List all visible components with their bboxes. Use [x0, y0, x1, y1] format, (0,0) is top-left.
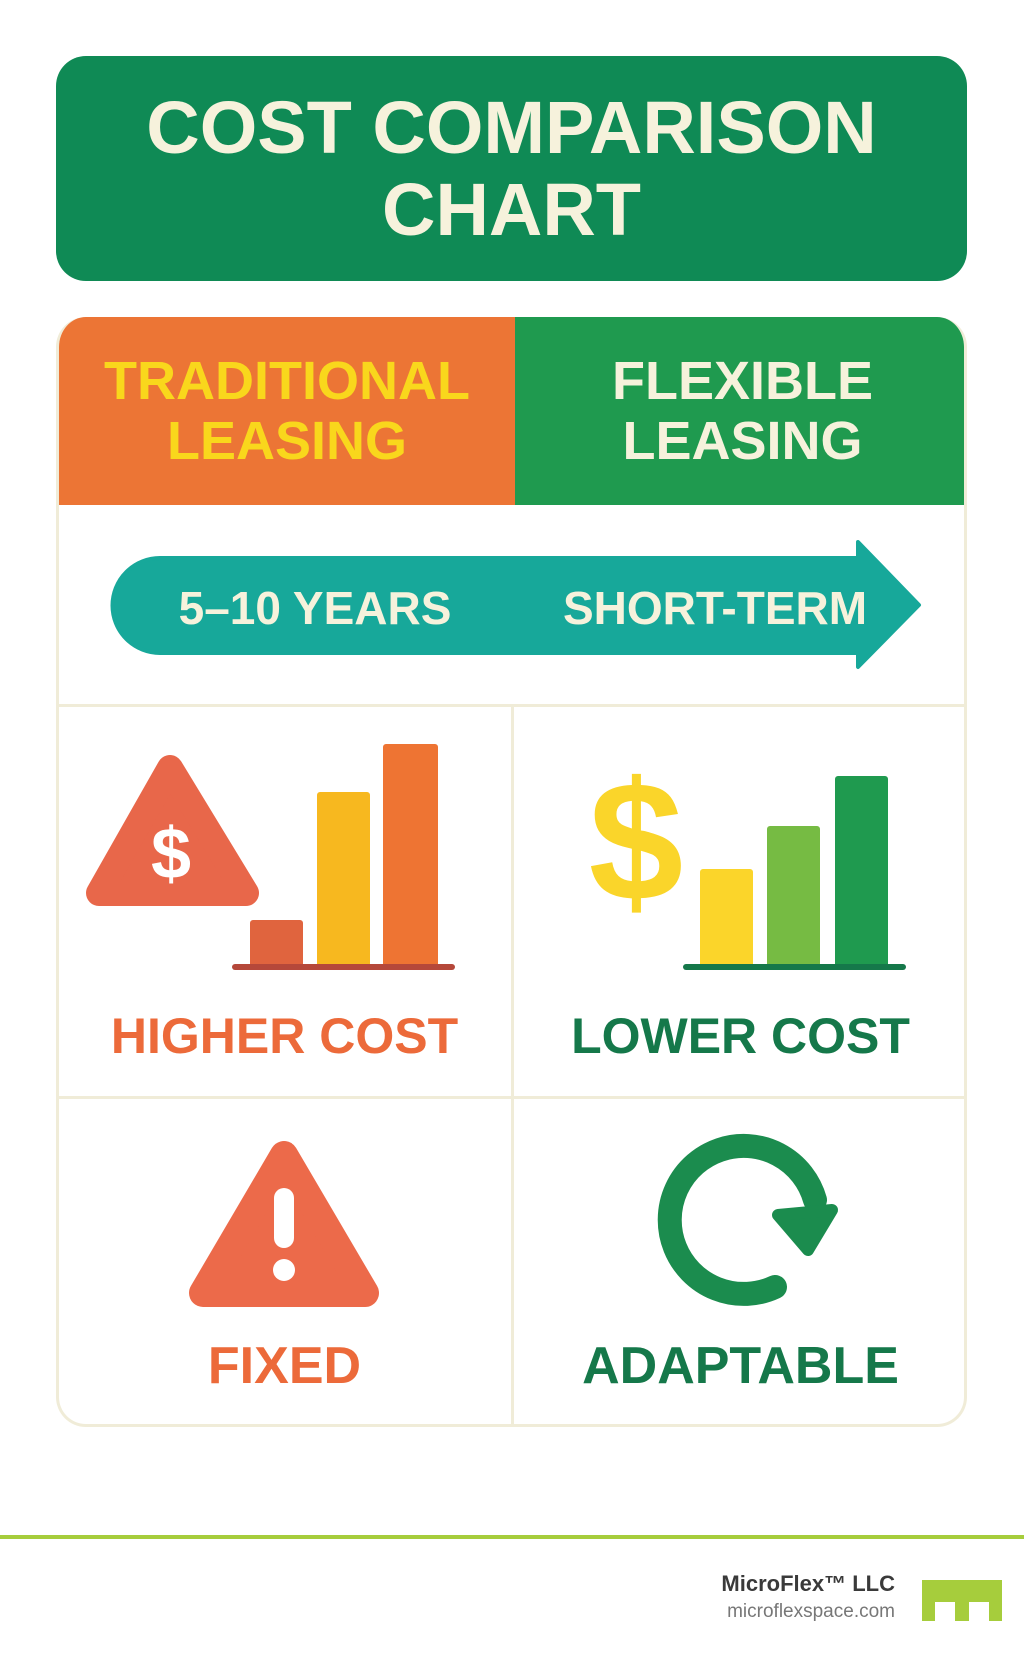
- title: [56, 56, 967, 281]
- footer: company text: [721, 1571, 895, 1622]
- header: traditional leasing: TRADITIONAL: [104, 351, 470, 411]
- arrow: timeline: 5–10 YEARS: [179, 582, 451, 634]
- title: COST COMPARISON: [146, 86, 877, 168]
- header: traditional leasing: LEASING: [167, 411, 407, 471]
- label: lower cost: LOWER COST: [571, 1008, 910, 1064]
- header: flexible leasing: FLEXIBLE: [612, 351, 873, 411]
- dividers: [58, 704, 965, 707]
- title: CHART: [382, 168, 641, 250]
- panel: comparison: [56, 317, 967, 1427]
- label: higher cost: HIGHER COST: [111, 1008, 458, 1064]
- footer: company text: MicroFlex™ LLC: [721, 1571, 895, 1596]
- icon: dollar with rising bars: $: [589, 747, 683, 937]
- footer: logo: [922, 1580, 1002, 1621]
- header: flexible leasing: [515, 317, 970, 505]
- arrow: timeline: SHORT-TERM: [563, 582, 867, 634]
- label: fixed: FIXED: [208, 1337, 361, 1395]
- label: adaptable: ADAPTABLE: [582, 1337, 899, 1395]
- footer line: [0, 1535, 1024, 1539]
- icon: cost warning with bars: $: [151, 814, 191, 894]
- footer: company text: microflexspace.com: [727, 1601, 895, 1622]
- header: flexible leasing: LEASING: [622, 411, 862, 471]
- header: traditional leasing: [59, 317, 515, 505]
